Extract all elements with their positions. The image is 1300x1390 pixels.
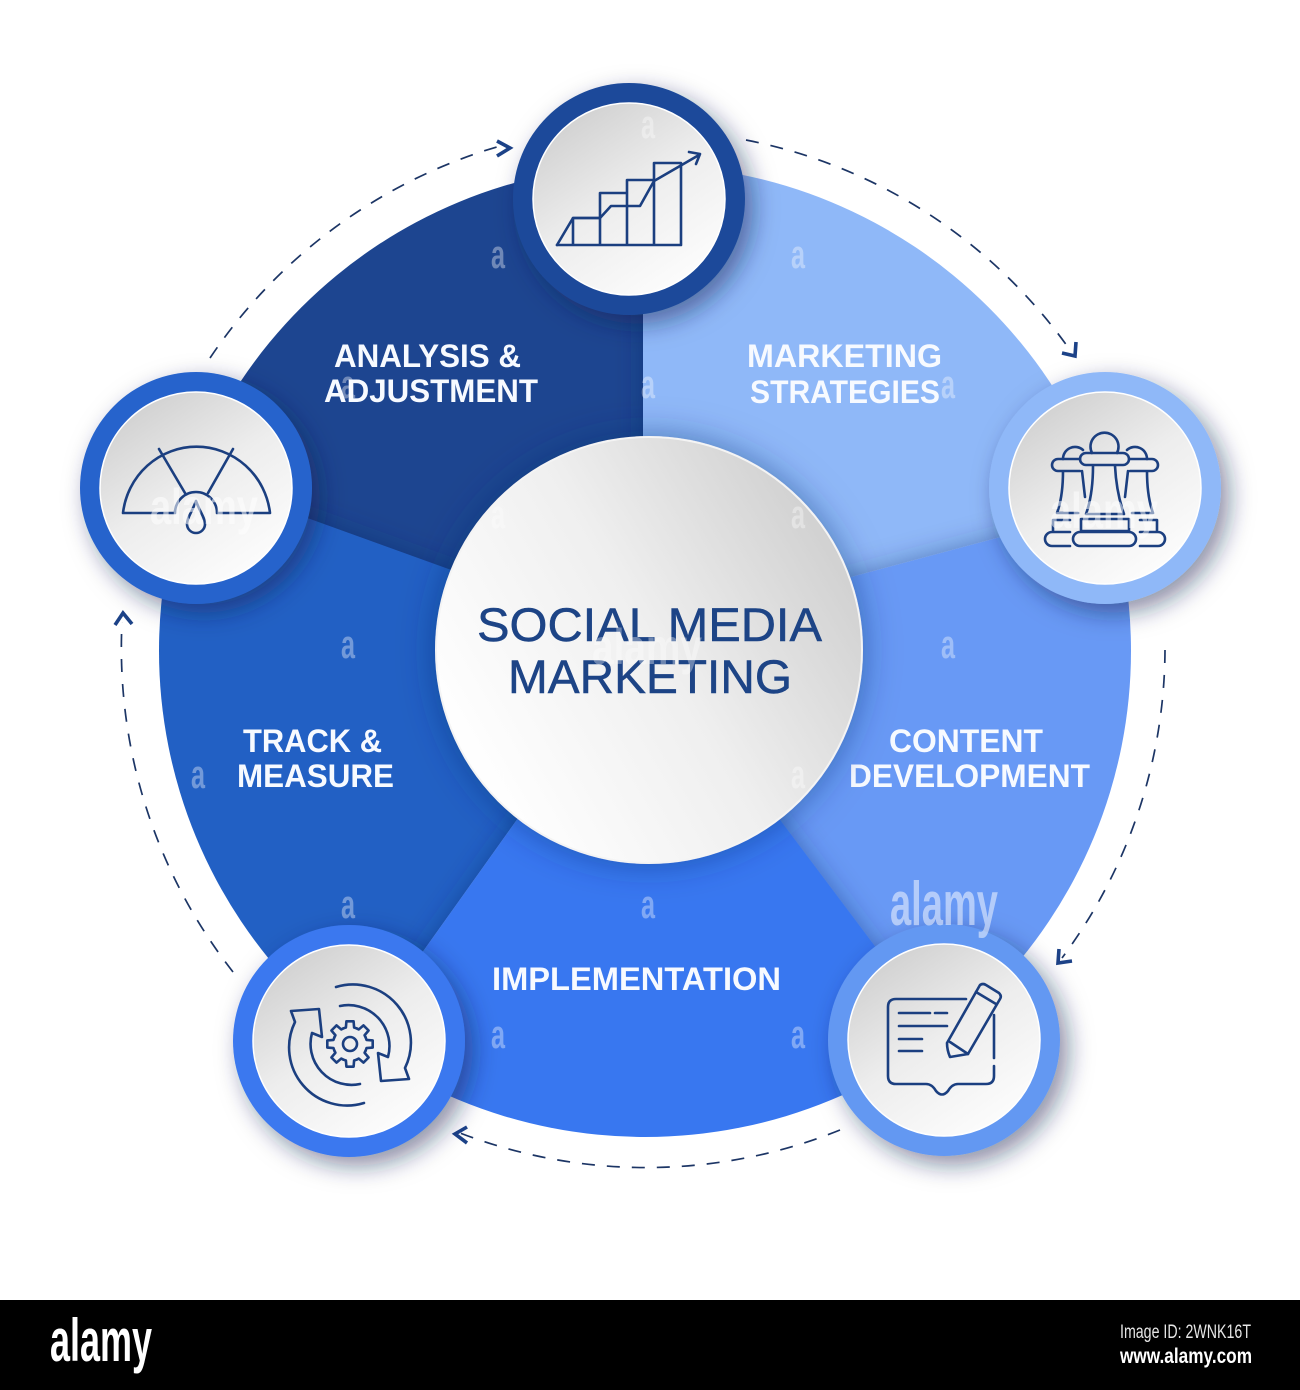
arrow: implementation to track: [115, 613, 233, 972]
watermark marks: alamy: [592, 619, 702, 675]
icon: speech note with pencil: [888, 984, 1001, 1094]
watermark marks: a: [341, 363, 355, 407]
arrow: analysis to marketing: [746, 140, 1076, 356]
centre circle: [436, 437, 862, 863]
watermark marks: a: [941, 363, 955, 407]
watermark marks: a: [491, 753, 505, 797]
icon: rising bar chart with arrow: [557, 152, 700, 245]
node: chess pawns: [989, 372, 1221, 604]
node: cycle and gear: [233, 925, 465, 1157]
icon: gear with circular arrows: [289, 984, 411, 1106]
label: analysis and adjustment: [324, 338, 538, 409]
title: MARKETING: [508, 650, 792, 703]
label: analysis and adjustment: ANALYSIS &: [334, 338, 521, 374]
watermark marks: a: [341, 883, 355, 927]
watermark marks: a: [491, 1013, 505, 1057]
node: writing pad: [828, 924, 1060, 1156]
watermark marks: a: [791, 493, 805, 537]
label: content development: DEVELOPMENT: [849, 758, 1090, 794]
label: implementation: IMPLEMENTATION: [492, 961, 781, 997]
segment: content development: [780, 524, 1131, 956]
arrow: marketing to content: [1058, 650, 1165, 963]
watermark marks: a: [491, 233, 505, 277]
label: track and measure: [237, 723, 394, 794]
arrow: track to analysis: [210, 141, 510, 358]
watermark marks: a: [641, 103, 655, 147]
footer url: www.alamy.com: [1119, 1345, 1252, 1368]
watermark marks: a: [641, 883, 655, 927]
watermark marks: a: [341, 623, 355, 667]
label: content development: CONTENT: [889, 723, 1043, 759]
watermark marks: alamy: [1050, 483, 1158, 539]
pie of five segments: [99, 102, 1202, 1168]
label: track and measure: MEASURE: [237, 758, 394, 794]
watermark marks: a: [791, 1013, 805, 1057]
watermark marks: [150, 103, 1158, 1057]
watermark marks: alamy: [150, 479, 258, 535]
label: content development: [849, 723, 1090, 794]
segment: marketing strategies: [642, 175, 1052, 577]
watermark marks: alamy: [890, 870, 998, 939]
node: growth chart: [513, 83, 745, 315]
watermark marks: a: [641, 363, 655, 407]
node: gauge: [80, 372, 312, 604]
label: track and measure: TRACK &: [243, 723, 382, 759]
label: analysis and adjustment: ADJUSTMENT: [324, 373, 538, 409]
watermark marks: a: [491, 493, 505, 537]
watermark marks: a: [191, 753, 205, 797]
watermark marks: a: [941, 623, 955, 667]
label: marketing strategies: [747, 338, 942, 410]
watermark marks: a: [791, 753, 805, 797]
label: marketing strategies: MARKETING: [747, 338, 942, 374]
arrow: content to implementation: [455, 1127, 840, 1168]
footer bar: [0, 1300, 1300, 1390]
icon: gauge meter with drop needle: [123, 447, 270, 533]
segment: implementation: [416, 812, 886, 1137]
title: [477, 598, 823, 703]
label: marketing strategies: STRATEGIES: [750, 374, 940, 410]
segment: track and measure: [159, 518, 518, 958]
title: SOCIAL MEDIA: [477, 598, 823, 651]
watermark marks: a: [791, 233, 805, 277]
footer logo: alamy: [50, 1307, 152, 1374]
icon: three pawns: [1045, 433, 1165, 546]
footer image id: Image ID: 2WNK16T: [1120, 1322, 1251, 1343]
segment: analysis and adjustment: [240, 183, 643, 570]
